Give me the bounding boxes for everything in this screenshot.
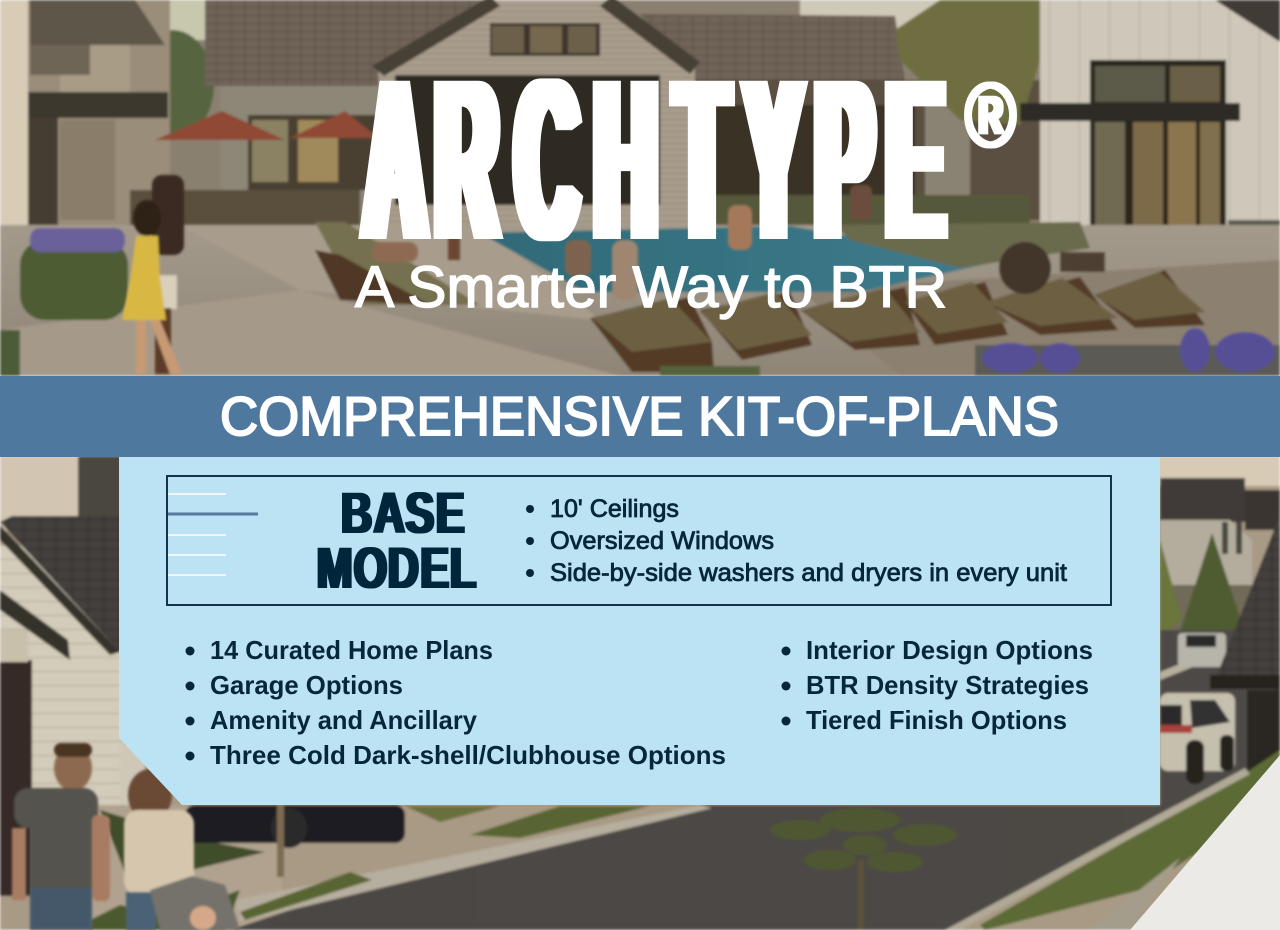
right feature list: Interior Design Options	[806, 635, 1093, 665]
right feature list	[782, 635, 1093, 735]
base model heading: BASE	[341, 481, 464, 546]
base model box	[167, 476, 1111, 605]
menu-line decoration	[168, 493, 258, 576]
base model heading: MODEL	[317, 536, 476, 601]
panel: kit-of-plans content	[119, 457, 1160, 805]
base model heading	[317, 481, 476, 601]
lower photo: neighbourhood street	[0, 456, 1280, 930]
hero swimmers and sunbathers	[372, 185, 872, 300]
base model feature list: Side-by-side washers and dryers in every unit	[550, 559, 1067, 587]
corner accent triangle	[1130, 755, 1280, 930]
tagline: A Smarter Way to BTR	[355, 255, 947, 320]
right feature list: Tiered Finish Options	[806, 705, 1067, 735]
left feature list: Three Cold Dark-shell/Clubhouse Options	[210, 740, 726, 770]
base model feature list: 10' Ceilings	[550, 495, 679, 523]
hero photo: pool courtyard	[0, 0, 1280, 376]
brand title ARCHTYPE: ARCHTYPE	[364, 31, 944, 288]
base model feature list	[526, 495, 1067, 587]
registered mark: ®	[965, 65, 1016, 167]
band heading: COMPREHENSIVE KIT-OF-PLANS	[220, 385, 1059, 447]
left feature list: Amenity and Ancillary	[210, 705, 478, 735]
left feature list: 14 Curated Home Plans	[210, 635, 493, 665]
right feature list: BTR Density Strategies	[806, 670, 1089, 700]
left feature list: Garage Options	[210, 670, 403, 700]
title band	[0, 376, 1280, 457]
lower photo people: family with stroller	[12, 743, 240, 930]
base model feature list: Oversized Windows	[550, 527, 774, 555]
hero people: couple walking	[122, 175, 184, 374]
left feature list	[186, 635, 726, 770]
